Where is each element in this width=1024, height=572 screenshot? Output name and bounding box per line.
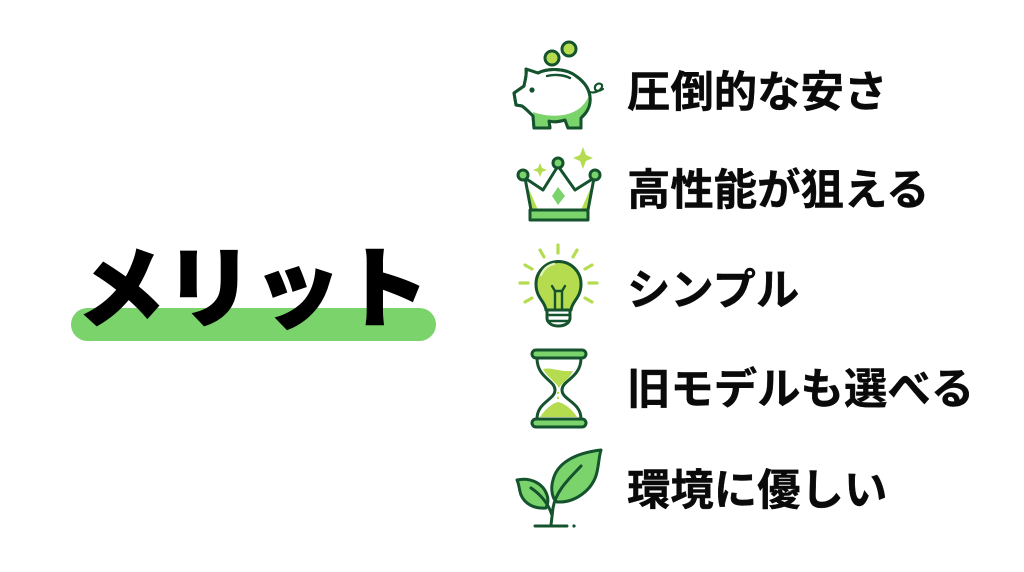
benefit 3: シンプル — [627, 267, 799, 315]
icon: piggy bank — [514, 42, 603, 128]
heading: merit with green underline — [71, 240, 436, 341]
benefit 4: 旧モデルも選べる — [627, 366, 974, 414]
title text: メリット — [77, 240, 429, 339]
icon: crown — [518, 147, 600, 220]
icon: hourglass — [532, 350, 586, 427]
green underline bar — [71, 308, 436, 341]
benefit 5: 環境に優しい — [627, 467, 887, 515]
benefit 2: 高性能が狙える — [627, 167, 929, 215]
benefit 1: 圧倒的な安さ — [627, 69, 887, 117]
icon: light bulb — [520, 245, 597, 326]
icon: sprout — [517, 450, 601, 528]
